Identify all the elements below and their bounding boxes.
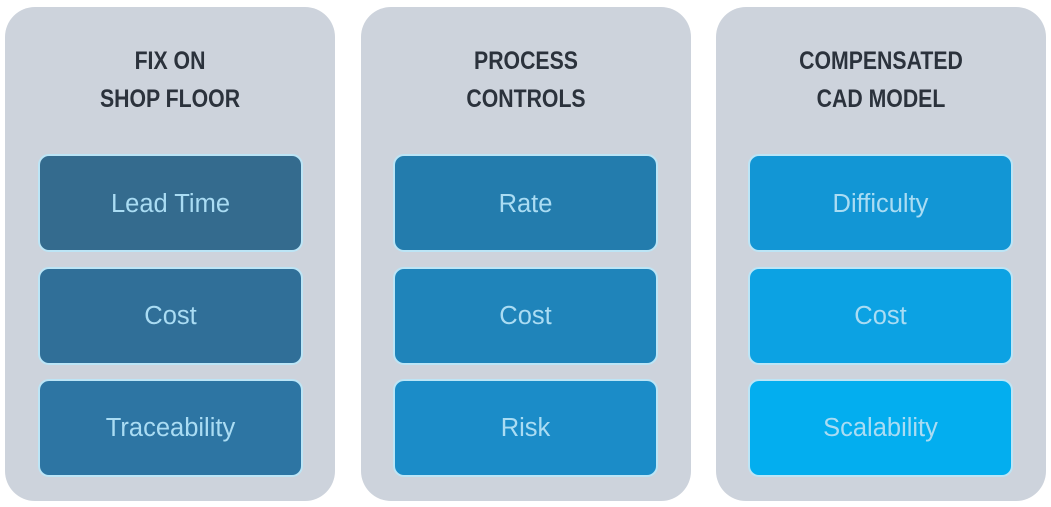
box: scalability: [748, 379, 1013, 477]
heading: compensated cad model: CAD MODEL: [817, 84, 945, 112]
box: risk: Risk: [501, 414, 550, 442]
box: scalability: Scalability: [823, 414, 938, 442]
heading: process controls: [466, 47, 586, 112]
box: cost: Cost: [144, 302, 197, 330]
box: difficulty: [748, 154, 1013, 252]
box: cost: Cost: [499, 302, 552, 330]
heading: fix on shop floor: FIX ON: [135, 47, 205, 75]
box: traceability: [38, 379, 303, 477]
box: rate: [393, 154, 658, 252]
heading: compensated cad model: COMPENSATED: [799, 47, 963, 75]
panel: process controls: [361, 7, 691, 501]
heading: process controls: CONTROLS: [466, 84, 586, 112]
box: cost: [38, 267, 303, 365]
box: cost: [393, 267, 658, 365]
box: rate: Rate: [499, 190, 552, 218]
box: lead time: [38, 154, 303, 252]
box: difficulty: Difficulty: [833, 190, 928, 218]
heading: fix on shop floor: [100, 47, 240, 112]
heading: compensated cad model: [799, 47, 963, 112]
panel: compensated cad model: [716, 7, 1046, 501]
box: traceability: Traceability: [106, 414, 235, 442]
box: lead time: Lead Time: [111, 190, 230, 218]
box: cost: Cost: [854, 302, 907, 330]
heading: fix on shop floor: SHOP FLOOR: [100, 84, 240, 112]
heading: process controls: PROCESS: [474, 47, 578, 75]
panel: fix on shop floor: [5, 7, 335, 501]
box: cost: [748, 267, 1013, 365]
box: risk: [393, 379, 658, 477]
